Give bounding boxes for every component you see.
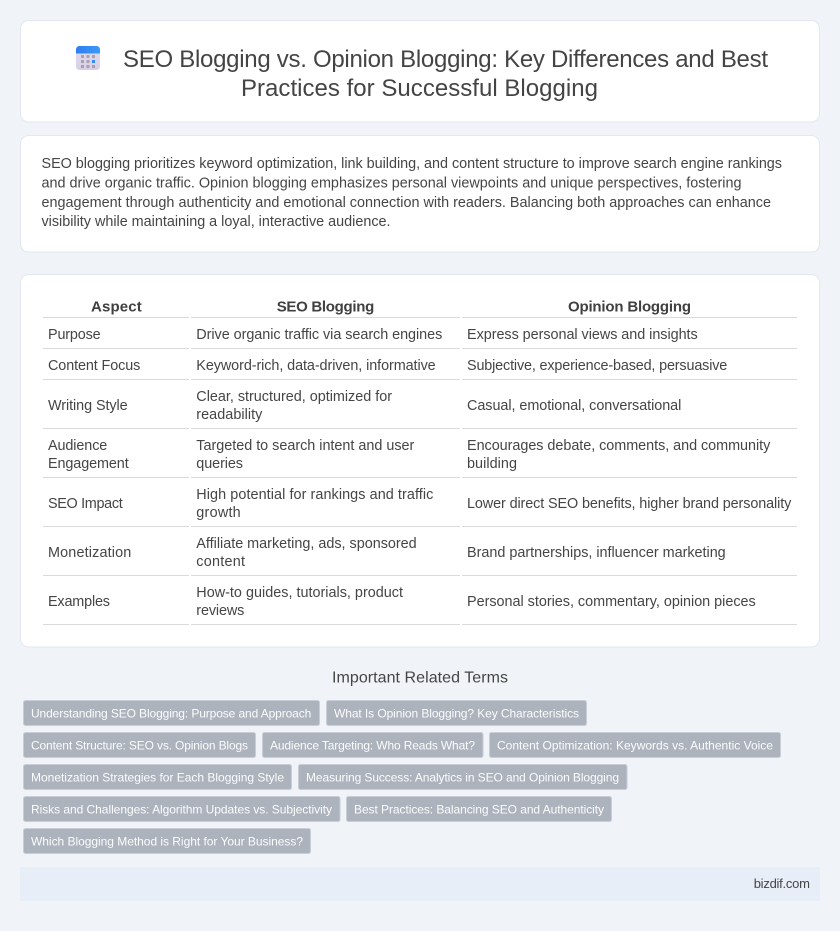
row: Purpose: Drive organic traffic via search engines xyxy=(196,327,442,343)
row: Writing Style xyxy=(43,389,797,429)
tag: Measuring Success: Analytics in SEO and Opinion Blogging xyxy=(306,770,619,784)
tag: Which Blogging Method is Right for Your Business? xyxy=(31,834,303,848)
row: Content Focus xyxy=(43,358,797,380)
row: Purpose: Express personal views and insights xyxy=(467,327,698,343)
tag: What Is Opinion Blogging? Key Characteristics xyxy=(334,706,579,720)
tag xyxy=(24,764,292,790)
footer: bizdif.com xyxy=(754,876,810,891)
table header row: Opinion Blogging xyxy=(568,298,691,316)
title xyxy=(123,46,768,102)
icon: calendar xyxy=(76,46,100,70)
tag xyxy=(262,732,483,758)
row: Purpose: Purpose xyxy=(48,327,101,343)
tag: Monetization Strategies for Each Blogging Style xyxy=(31,770,284,784)
row: Monetization: Brand partnerships, influencer marketing xyxy=(467,545,726,561)
row: Monetization: content xyxy=(196,554,245,570)
row: Examples: How-to guides, tutorials, product xyxy=(196,585,403,601)
tag xyxy=(298,764,627,790)
row: Audience Engagement xyxy=(43,438,797,478)
heading: important related terms: Important Related Terms xyxy=(332,670,508,686)
row: Audience Engagement: Encourages debate, comments, and community xyxy=(467,438,771,454)
intro paragraph: SEO blogging prioritizes keyword optimization, link building, and content structure to improve search engine rankings xyxy=(42,156,782,172)
table header row: Aspect xyxy=(91,298,142,316)
row: Writing Style: Clear, structured, optimized for xyxy=(196,389,392,405)
tag xyxy=(24,732,256,758)
title: Practices for Successful Blogging xyxy=(241,75,598,102)
row: SEO Impact xyxy=(43,487,797,527)
row: Content Focus: Keyword-rich, data-driven, informative xyxy=(196,358,436,374)
row: Monetization xyxy=(43,536,797,576)
tag xyxy=(24,796,340,822)
tag: Content Structure: SEO vs. Opinion Blogs xyxy=(31,738,248,752)
row: Examples xyxy=(43,585,797,625)
header panel xyxy=(20,20,820,122)
row: Audience Engagement: Audience xyxy=(48,438,107,454)
intro paragraph: visibility while maintaining a loyal, interactive audience. xyxy=(42,214,390,230)
row: Examples: Personal stories, commentary, opinion pieces xyxy=(467,594,756,610)
row: Purpose xyxy=(43,327,797,349)
row: SEO Impact: SEO Impact xyxy=(48,496,123,512)
row: Audience Engagement: Targeted to search intent and user xyxy=(196,438,415,454)
intro paragraph: engagement through authenticity and emotional connection with readers. Balancing both approaches can enhance xyxy=(42,195,771,211)
row: Examples: reviews xyxy=(196,603,244,619)
tag xyxy=(24,828,310,854)
table header row: SEO Blogging xyxy=(277,298,374,316)
row: Audience Engagement: building xyxy=(467,456,517,472)
panel: comparison table xyxy=(20,274,820,647)
tag xyxy=(490,732,780,758)
intro paragraph: and drive organic traffic. Opinion blogging emphasizes personal viewpoints and unique perspectives, fostering xyxy=(42,176,742,192)
row: Content Focus: Subjective, experience-based, persuasive xyxy=(467,358,727,374)
row: Writing Style: Casual, emotional, conversational xyxy=(467,398,681,414)
row: SEO Impact: Lower direct SEO benefits, higher brand personality xyxy=(467,496,792,512)
row: Writing Style: readability xyxy=(196,407,263,423)
row: Content Focus: Content Focus xyxy=(48,358,140,374)
row: SEO Impact: High potential for rankings and traffic xyxy=(196,487,433,503)
tag: Risks and Challenges: Algorithm Updates vs. Subjectivity xyxy=(31,802,332,816)
tag: Best Practices: Balancing SEO and Authenticity xyxy=(354,802,604,816)
row: Monetization: Monetization xyxy=(48,545,131,561)
panel: intro text xyxy=(20,136,820,252)
tag xyxy=(326,700,586,726)
row: Examples: Examples xyxy=(48,594,110,610)
row: Audience Engagement: Engagement xyxy=(48,456,129,472)
row: SEO Impact: growth xyxy=(196,505,241,521)
row: Monetization: Affiliate marketing, ads, sponsored xyxy=(196,536,417,552)
intro paragraph xyxy=(42,156,782,230)
row: Writing Style: Writing Style xyxy=(48,398,128,414)
row: Audience Engagement: queries xyxy=(196,456,243,472)
tag: Content Optimization: Keywords vs. Authentic Voice xyxy=(497,738,773,752)
related terms tags xyxy=(24,700,780,854)
tag: Audience Targeting: Who Reads What? xyxy=(270,738,475,752)
tag xyxy=(24,700,320,726)
tag: Understanding SEO Blogging: Purpose and Approach xyxy=(31,706,311,720)
footer xyxy=(20,867,820,901)
tag xyxy=(346,796,612,822)
table header row xyxy=(43,298,797,318)
title: SEO Blogging vs. Opinion Blogging: Key Differences and Best xyxy=(123,46,768,73)
